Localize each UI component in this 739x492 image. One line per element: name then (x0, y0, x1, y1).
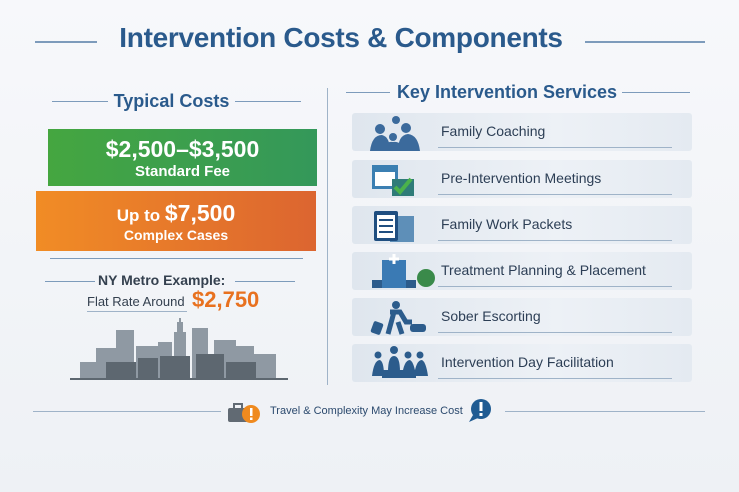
footer note (33, 399, 705, 423)
NY metro example: NY Metro Example: (98, 272, 225, 288)
row: sober escorting (352, 298, 692, 336)
skyline (70, 318, 288, 380)
icon: speech bubble (469, 399, 491, 422)
row: intervention day facilitation (352, 344, 692, 382)
orange box: complex cases: Complex Cases (124, 227, 228, 243)
row: family work packets (352, 206, 692, 244)
NY metro example: Flat Rate Around (87, 294, 185, 309)
title: Intervention Costs & Components (119, 22, 563, 53)
row: sober escorting: Sober Escorting (441, 308, 541, 324)
icon: suitcase warning (228, 403, 260, 423)
row: pre-intervention meetings: Pre-Intervention Meetings (441, 170, 601, 186)
heading: key services: Key Intervention Services (397, 82, 617, 102)
row: family coaching (352, 113, 692, 151)
heading: typical costs: Typical Costs (114, 91, 229, 111)
green box: standard fee: $2,500–$3,500 (106, 136, 259, 162)
green box: standard fee: Standard Fee (135, 163, 230, 180)
row: family work packets: Family Work Packets (441, 216, 572, 232)
orange box: complex cases: Up to $7,500 (117, 200, 235, 226)
green box: standard fee (48, 129, 317, 186)
row: pre-intervention meetings (352, 160, 692, 198)
row: intervention day facilitation: Intervention Day Facilitation (441, 354, 614, 370)
footer note: Travel & Complexity May Increase Cost (270, 405, 463, 417)
orange box: complex cases (36, 191, 316, 251)
row: treatment planning (352, 252, 692, 290)
row: family coaching: Family Coaching (441, 123, 545, 139)
NY metro example: $2,750 (192, 287, 259, 312)
NY metro example (45, 272, 295, 312)
divider (327, 88, 328, 385)
row: treatment planning: Treatment Planning & Placement (441, 262, 646, 278)
